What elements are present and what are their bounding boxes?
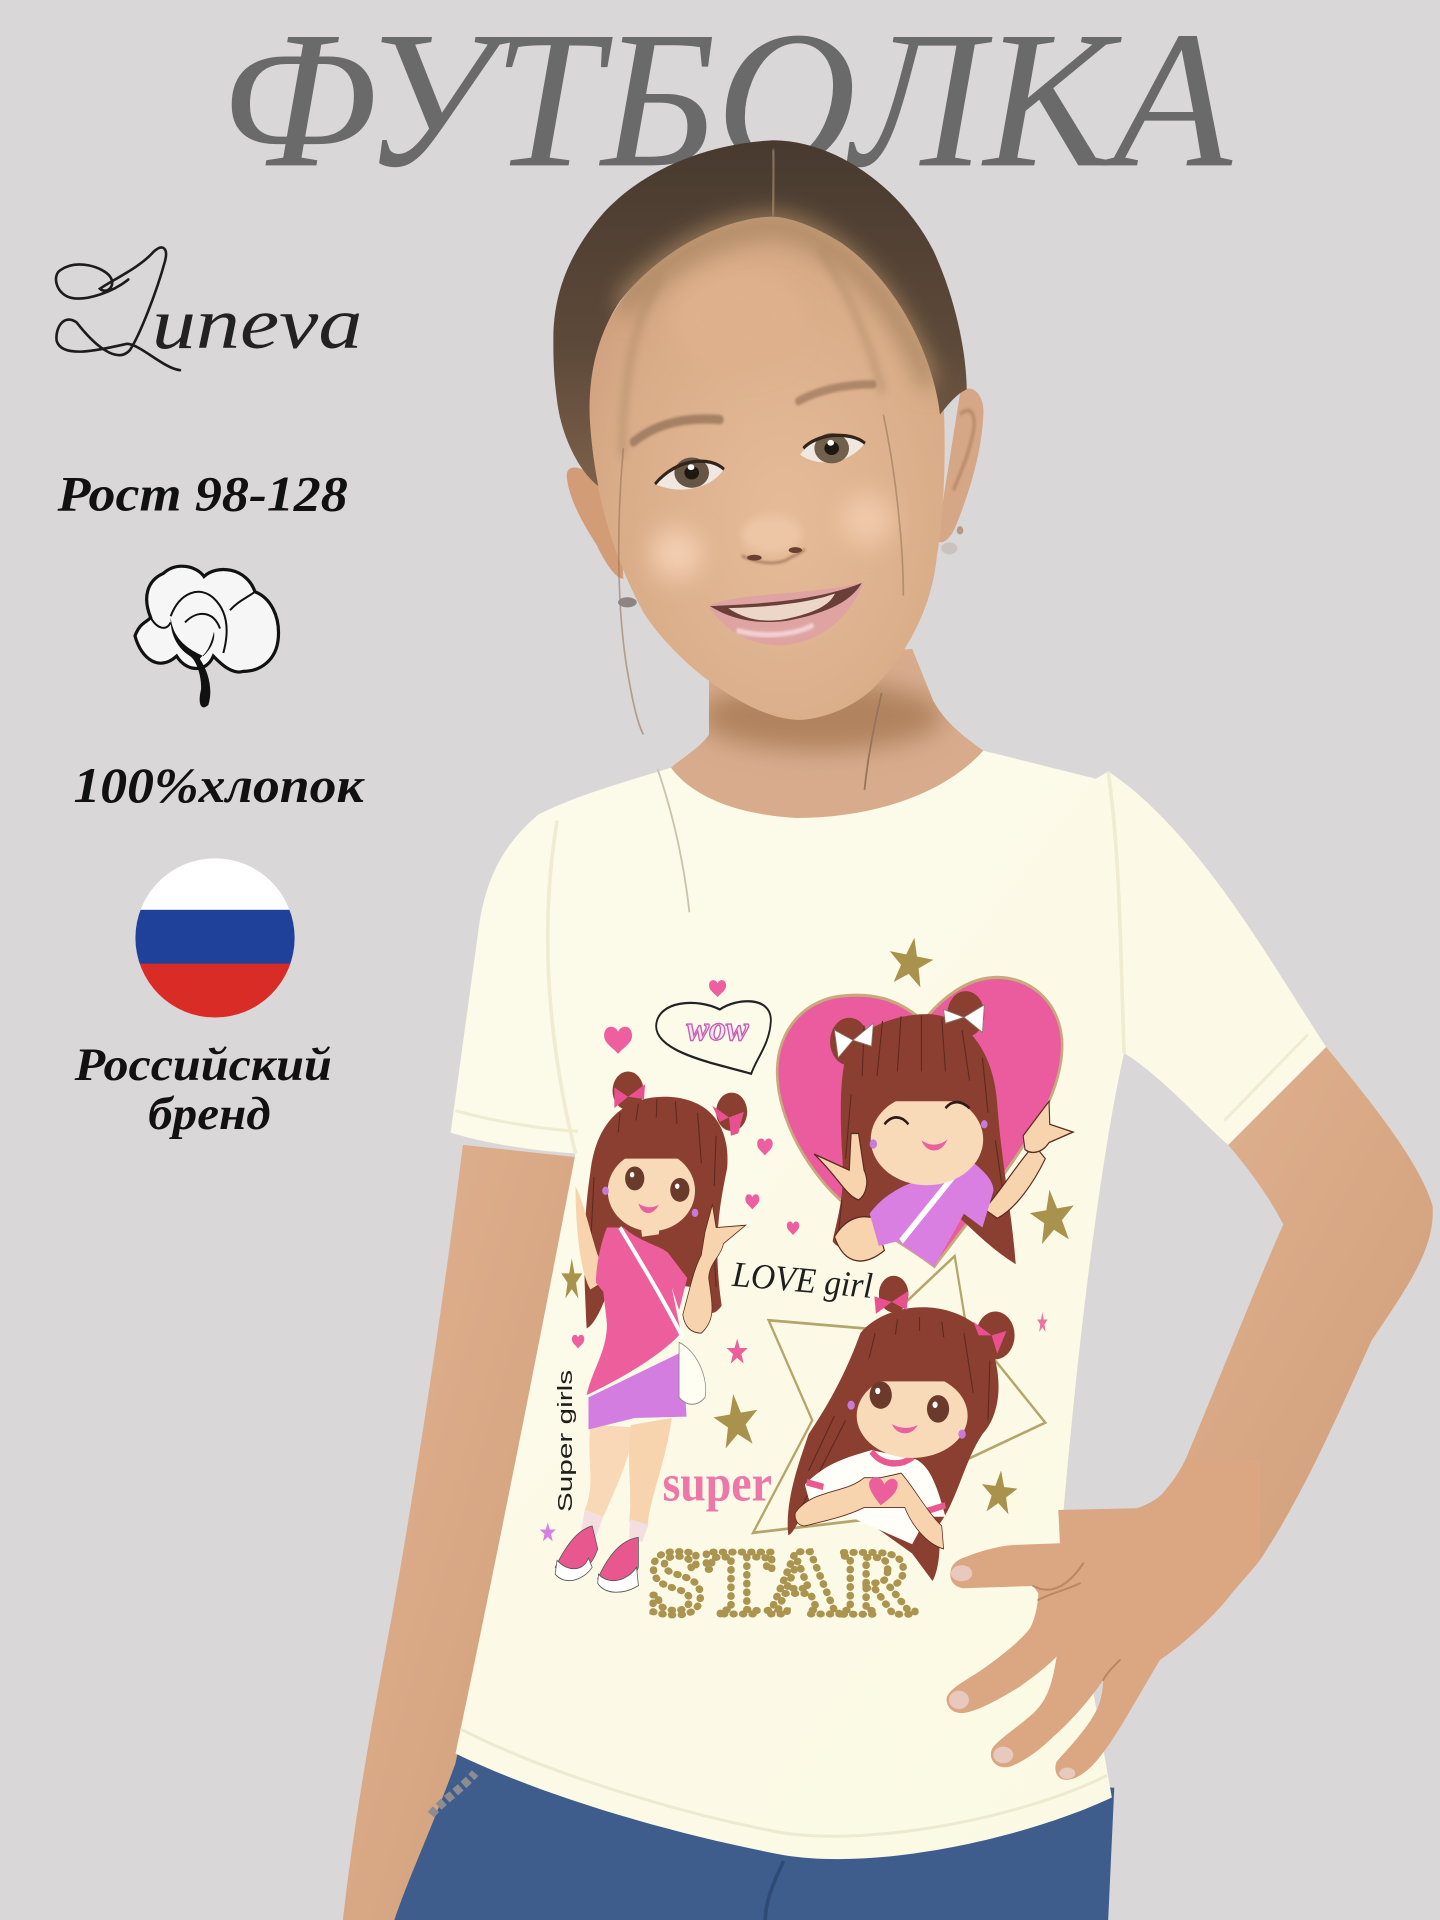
cartoon girl left (555, 1071, 747, 1592)
mouth (708, 582, 863, 645)
brand logo: Luneva: uneva (152, 283, 362, 364)
star outline (753, 1256, 1045, 1533)
brand origin text (74, 1040, 332, 1140)
LOVE girl lettering: LOVE girl (730, 1255, 874, 1307)
icon: russian flag (135, 857, 296, 1019)
right arm (1139, 1047, 1433, 1560)
STAR dotted lettering: STAR (648, 1529, 915, 1635)
head and face (553, 140, 983, 734)
brand origin text: Российский (74, 1040, 332, 1091)
photo: child model (343, 140, 1433, 1920)
cartoon girl top right (814, 991, 1073, 1267)
face skin (587, 217, 945, 720)
left arm (343, 1145, 576, 1920)
nose (742, 516, 805, 563)
icon: cotton boll (135, 566, 279, 707)
t-shirt print (540, 933, 1077, 1635)
brand origin text: бренд (148, 1089, 271, 1140)
earrings (618, 526, 963, 607)
height text: Рост 98-128 (56, 466, 348, 522)
vertical super girls lettering: Super girls (553, 1370, 576, 1512)
hand on hip (947, 1460, 1260, 1780)
material text: 100%хлопок (73, 757, 365, 813)
eye left (655, 458, 724, 490)
hair strands (619, 415, 903, 734)
hair (553, 140, 967, 486)
neck (661, 649, 992, 820)
fingernails (949, 1565, 1075, 1779)
gold stars (561, 933, 1077, 1515)
hearts (572, 980, 799, 1348)
eye right (800, 433, 865, 463)
t-shirt (451, 751, 1326, 1859)
wow speech heart: wow (687, 1009, 750, 1048)
brand logo: Luneva (56, 248, 362, 370)
cartoon girl bottom right (788, 1276, 1015, 1581)
eyebrows (633, 384, 873, 442)
super lettering: super (662, 1456, 772, 1513)
ear left (567, 468, 623, 579)
wow speech heart (656, 1001, 771, 1074)
jeans (389, 1745, 1114, 1920)
pink stars (540, 1312, 1048, 1541)
big pink heart (777, 977, 1062, 1267)
cheek highlights (650, 267, 893, 579)
ear right (937, 389, 983, 542)
